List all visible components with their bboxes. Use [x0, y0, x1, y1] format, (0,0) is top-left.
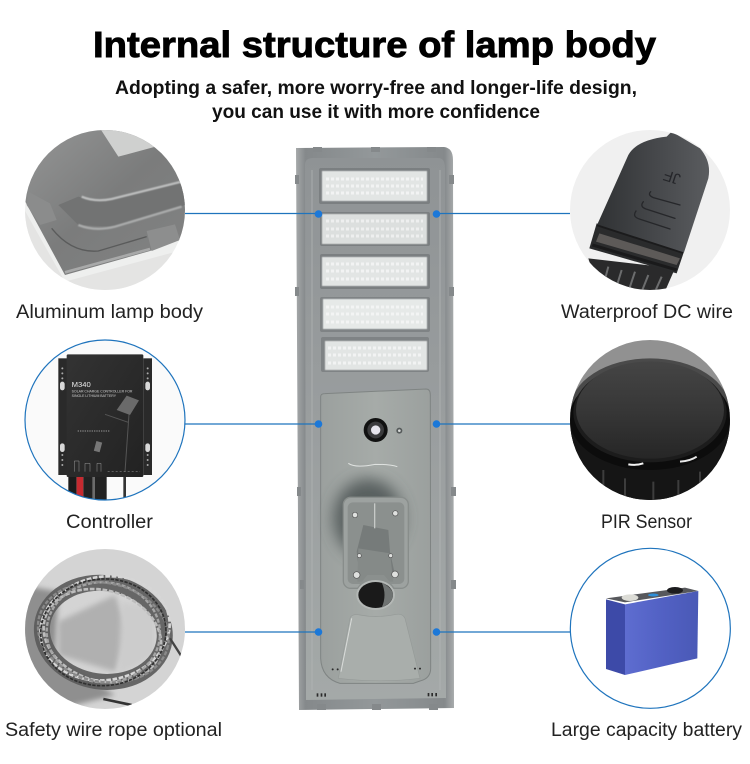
wires	[68, 477, 77, 494]
LED panel 2	[320, 212, 430, 246]
flange groove	[52, 228, 147, 251]
plug body	[597, 132, 709, 252]
glass lens	[576, 361, 724, 459]
label: aluminum lamp body: Aluminum lamp body	[16, 302, 204, 323]
bracket shadow	[333, 478, 403, 558]
light background wedge	[25, 212, 172, 290]
mounting plate	[343, 497, 408, 588]
emboss line	[348, 463, 397, 467]
vents	[317, 668, 437, 697]
LED panel 1	[319, 168, 430, 204]
blue ring	[570, 548, 730, 708]
bolts	[352, 511, 398, 578]
photo: PIR sensor	[567, 338, 733, 502]
LED panel 5	[321, 337, 429, 372]
bracket arm	[357, 525, 395, 578]
subtitle	[115, 78, 637, 123]
label: controller: Controller	[66, 512, 154, 533]
wires	[588, 258, 674, 290]
lamp body	[295, 147, 456, 710]
ribbed base	[570, 422, 730, 500]
connector lines	[185, 214, 570, 632]
label: pir sensor: PIR Sensor	[601, 512, 693, 533]
connector dots	[315, 210, 440, 636]
collar rings	[589, 223, 684, 273]
PIR sensor window	[364, 418, 388, 442]
blue ring	[25, 340, 185, 500]
outer frame	[296, 147, 454, 710]
photo: waterproof DC wire	[567, 128, 733, 295]
photo: controller: SOLAR CHARGE CONTROLLER FOR	[72, 390, 133, 394]
label: large capacity battery: Large capacity battery	[551, 720, 742, 741]
subtitle: you can use it with more confidence	[212, 102, 540, 123]
raised ribs	[635, 192, 680, 229]
photo: battery	[570, 548, 730, 708]
trapezoid embossing	[338, 614, 420, 681]
label: safety wire rope: Safety wire rope optional	[5, 720, 222, 741]
LED panel 3	[320, 254, 430, 289]
small screw	[396, 428, 402, 434]
photo: controller	[25, 340, 185, 502]
photo: controller: M340	[72, 380, 91, 389]
rim	[570, 394, 730, 470]
mounting ears	[58, 358, 68, 475]
scalloped top edge	[570, 358, 730, 415]
battery front	[625, 591, 698, 675]
top surface	[22, 128, 188, 275]
photo: safety wire rope	[25, 549, 185, 709]
title: Internal structure of lamp body	[93, 24, 656, 65]
photo: controller: SINGLE LITHIUM BATTERY	[72, 394, 117, 398]
recessed sensor panel	[321, 389, 431, 683]
top corner bracket	[101, 130, 154, 156]
hinge clips	[147, 224, 180, 251]
battery side	[606, 599, 625, 675]
pipe opening	[357, 575, 395, 588]
subtitle: Adopting a safer, more worry-free and longer-life design,	[115, 78, 637, 99]
battery top	[606, 588, 698, 602]
photo: aluminum lamp body	[22, 128, 188, 298]
side surface	[58, 180, 185, 227]
rope coils	[29, 566, 182, 705]
terminals	[622, 594, 638, 601]
solar panel graphic	[117, 396, 139, 415]
moulded JF mark: JF	[661, 166, 683, 187]
LED panel 4	[320, 297, 430, 332]
inner plate	[305, 158, 446, 700]
terminals	[74, 461, 140, 472]
label: waterproof dc wire: Waterproof DC wire	[561, 302, 733, 323]
reflections	[628, 463, 643, 465]
controller case	[67, 354, 143, 477]
